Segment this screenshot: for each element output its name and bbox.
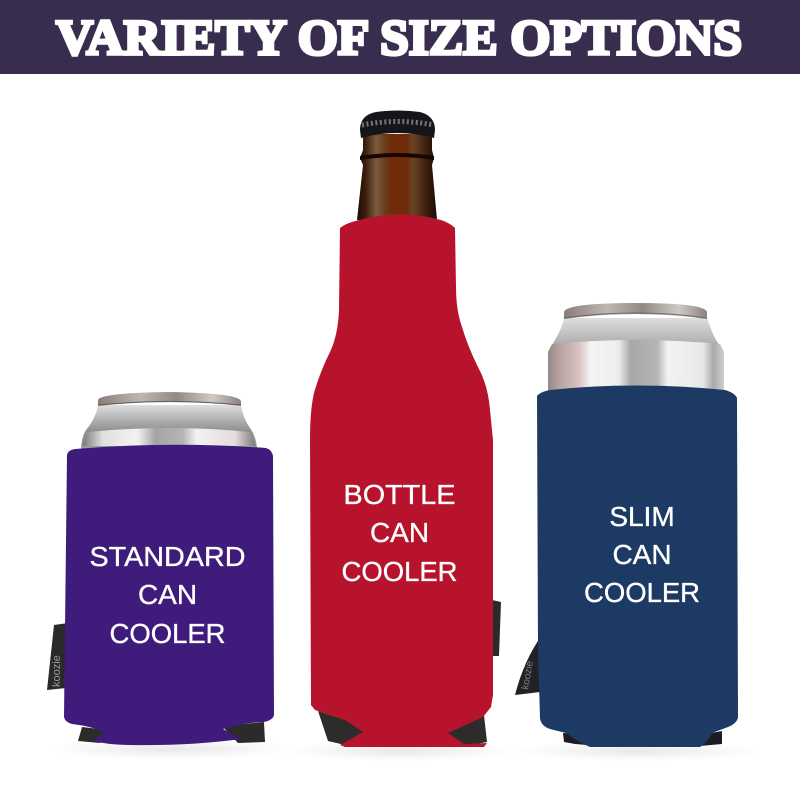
icon: slim side tag (515, 635, 542, 695)
label: slim can cooler: SLIM (609, 501, 675, 532)
label: slim can cooler: COOLER (584, 577, 700, 608)
icon: standard purple sleeve (64, 445, 274, 745)
icon: slim side tag: koozie (520, 660, 536, 691)
icon: standard can top (81, 392, 257, 450)
label: standard can cooler: STANDARD (90, 541, 246, 572)
icon: slim bottom notches (563, 731, 722, 746)
label: bottle can cooler: BOTTLE (344, 479, 456, 510)
icon: bottle bottom notches (318, 711, 487, 746)
label: bottle can cooler: COOLER (342, 556, 458, 587)
label: slim can cooler: CAN (612, 539, 672, 570)
standard can cooler (47, 392, 274, 745)
label: standard can cooler: CAN (138, 579, 197, 610)
slim can cooler (515, 303, 738, 747)
icon: bottle red sleeve (310, 214, 493, 747)
icon: bottle side tag (492, 600, 501, 656)
icon: standard bottom notches (78, 722, 265, 743)
icon: beer bottle neck (357, 110, 437, 220)
icon: standard side tag (47, 623, 68, 690)
title: VARIETY OF SIZE OPTIONS (56, 9, 742, 65)
icon: standard side tag: koozie (51, 655, 63, 687)
label: slim can cooler (584, 501, 700, 608)
icon: slim navy sleeve (537, 386, 738, 747)
icon: slim can top (548, 303, 724, 392)
label: standard can cooler (90, 541, 246, 649)
floor shadows (45, 739, 763, 761)
header banner (0, 0, 800, 74)
label: bottle can cooler (342, 479, 458, 587)
label: bottle can cooler: CAN (370, 517, 429, 548)
label: standard can cooler: COOLER (110, 618, 226, 649)
bottle can cooler (310, 110, 501, 747)
